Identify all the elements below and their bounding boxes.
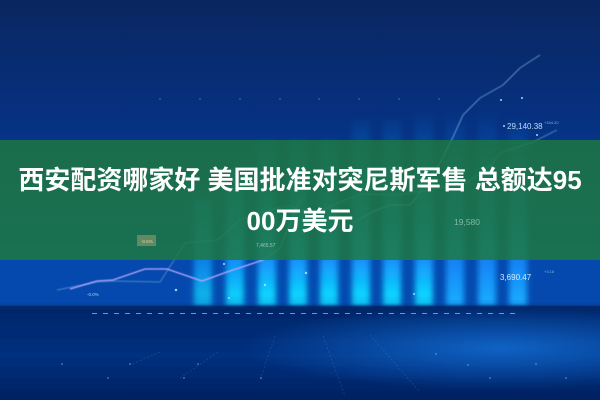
floor (0, 306, 600, 400)
value label: 3,690.47: 3,690.47 (500, 273, 532, 282)
glowing vertical bars (194, 110, 527, 306)
chart line: middle trend (57, 130, 557, 290)
tag: percent: -0.6% (141, 239, 153, 244)
value label: 7,465.57: 7,465.57 (256, 243, 276, 249)
floor perspective lines (130, 335, 420, 396)
title: 西安配资哪家好 美国批准对突尼斯军售 总额达9500万美元 (18, 165, 582, 236)
value label: 0.0%: -0.0% (87, 292, 99, 297)
sparkle dots (159, 97, 538, 299)
background sky (0, 0, 600, 306)
green title band (0, 140, 600, 260)
value label: small change bottom: +3.18 (544, 269, 555, 274)
chart line: rising end (263, 200, 300, 260)
value label: 29,140.38: 29,140.38 (507, 122, 543, 131)
dashed baseline (92, 312, 520, 314)
value label: 19,580: 19,580 (454, 217, 480, 227)
floor dots (61, 353, 567, 379)
value label: small change top: +184.20 (544, 120, 559, 125)
chart line: purple trend (70, 260, 263, 289)
tag: percent (137, 235, 156, 246)
chart line: upper trend (353, 55, 540, 223)
